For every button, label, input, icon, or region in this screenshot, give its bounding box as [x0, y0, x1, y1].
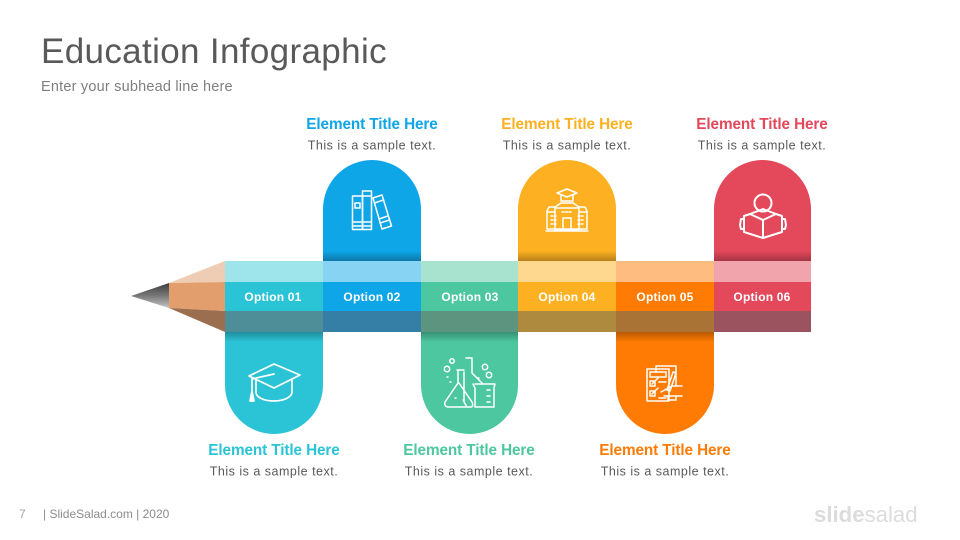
- icon: reader with book: [740, 194, 786, 238]
- option labels: Option 02: [343, 290, 401, 304]
- logo: slidesalad: [814, 502, 918, 527]
- caption: option 01: Element Title Here: [208, 442, 340, 459]
- icon: books: [352, 191, 392, 230]
- caption: option 04: This is a sample text.: [503, 138, 631, 152]
- caption: option 03: This is a sample text.: [405, 464, 533, 478]
- caption: option 02: [306, 116, 438, 152]
- capsule: option 06: [714, 160, 811, 261]
- icon: graduation cap: [249, 364, 300, 401]
- option labels: Option 03: [441, 290, 499, 304]
- caption: option 04: Element Title Here: [501, 116, 633, 133]
- caption: option 01: This is a sample text.: [210, 464, 338, 478]
- caption: option 06: This is a sample text.: [698, 138, 826, 152]
- pencil body: [225, 261, 811, 332]
- footer: 7: [19, 507, 26, 521]
- caption: option 03: [403, 442, 535, 478]
- caption: option 05: This is a sample text.: [601, 464, 729, 478]
- option labels: Option 06: [733, 290, 791, 304]
- caption: option 04: [501, 116, 633, 152]
- capsule: option 05: [616, 332, 714, 434]
- caption: option 05: Element Title Here: [599, 442, 731, 459]
- caption: option 02: This is a sample text.: [308, 138, 436, 152]
- capsule: option 03: [421, 332, 518, 434]
- capsule: option 02: [323, 160, 421, 261]
- capsule: option 01: [225, 332, 323, 434]
- icon: school building: [546, 189, 588, 231]
- icon: checklist and hand: [647, 366, 682, 401]
- pencil tip: [131, 261, 225, 332]
- capsule: option 04: [518, 160, 616, 261]
- option labels: Option 05: [636, 290, 694, 304]
- option labels: Option 04: [538, 290, 596, 304]
- subtitle: Enter your subhead line here: [41, 79, 233, 95]
- caption: option 06: Element Title Here: [696, 116, 828, 133]
- icon: lab flasks: [444, 358, 495, 407]
- option labels: Option 01: [244, 290, 302, 304]
- option labels: [244, 290, 791, 304]
- footer: | SlideSalad.com | 2020: [43, 507, 170, 521]
- title: Education Infographic: [41, 32, 387, 71]
- caption: option 03: Element Title Here: [403, 442, 535, 459]
- caption: option 01: [208, 442, 340, 478]
- caption: option 06: [696, 116, 828, 152]
- caption: option 05: [599, 442, 731, 478]
- caption: option 02: Element Title Here: [306, 116, 438, 133]
